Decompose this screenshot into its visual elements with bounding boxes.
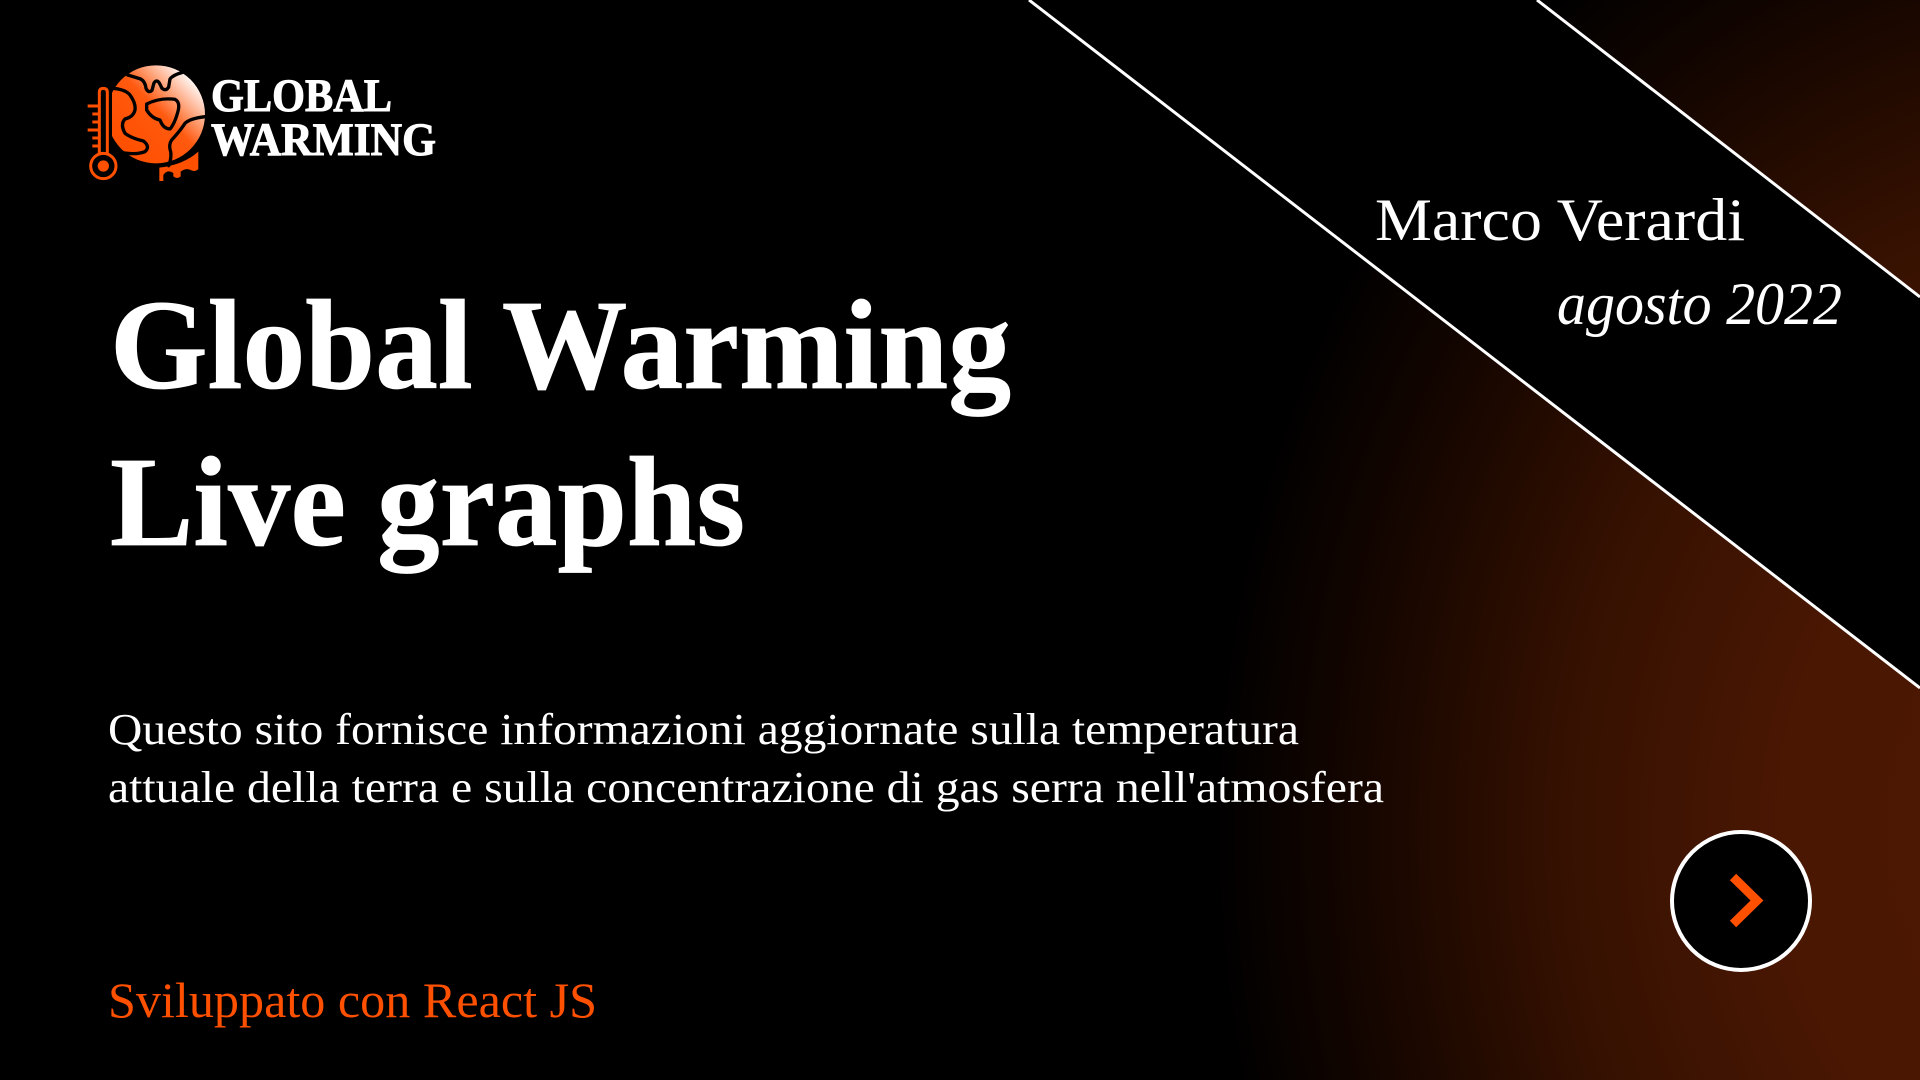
title xyxy=(110,274,1011,573)
logo text xyxy=(211,70,436,166)
diagonal line lower xyxy=(1029,0,1920,688)
next button xyxy=(1672,832,1810,970)
title: Global Warming xyxy=(110,274,1011,416)
icon: chevron xyxy=(1733,877,1757,924)
description xyxy=(108,705,1384,812)
logo xyxy=(88,65,436,181)
title: Live graphs xyxy=(110,431,745,573)
description: Questo sito fornisce informazioni aggiornate sulla temperatura xyxy=(108,705,1299,754)
footer note: Sviluppato con React JS xyxy=(108,972,597,1028)
logo text: WARMING xyxy=(211,114,436,166)
description: attuale della terra e sulla concentrazione di gas serra nell'atmosfera xyxy=(108,763,1384,812)
icon: melting globe with thermometer xyxy=(88,65,205,181)
logo text: GLOBAL xyxy=(211,70,392,122)
diagonal line upper xyxy=(1537,0,1920,297)
author: Marco Verardi xyxy=(1375,187,1745,253)
diagonal black band xyxy=(1029,0,1920,688)
date: agosto 2022 xyxy=(1557,271,1842,337)
